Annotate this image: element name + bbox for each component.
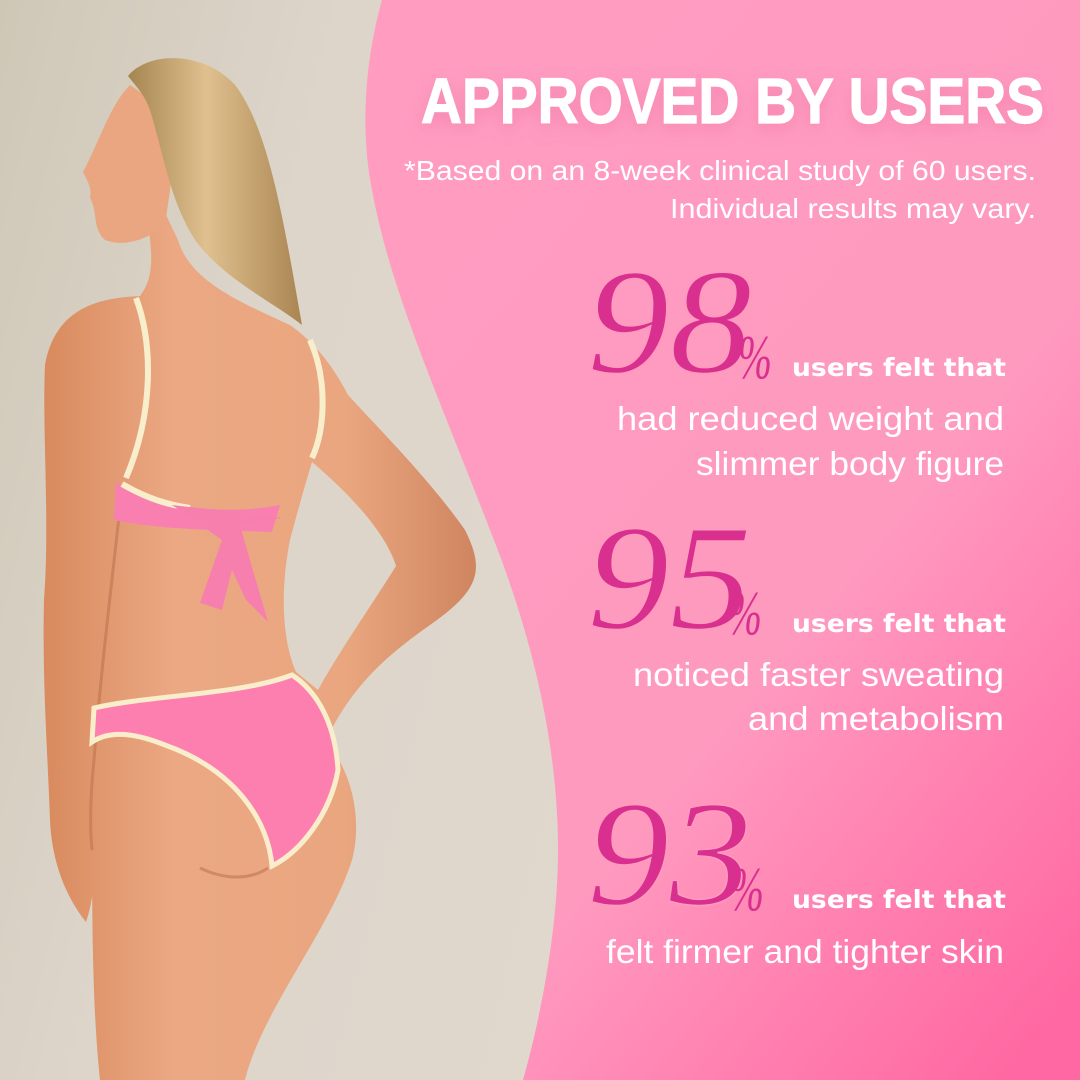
- bikini straps: [122, 298, 323, 508]
- figure: woman seen from behind in pink swimwear: [44, 58, 476, 1080]
- stat: 98%: had reduced weight and: [617, 400, 1004, 437]
- body: [44, 150, 476, 1080]
- body shading: [91, 490, 268, 877]
- stat: 93%: users felt that: [792, 885, 1006, 914]
- gap between arm and waist: [284, 462, 396, 690]
- bikini tie: [172, 505, 282, 622]
- bikini bottom: [92, 675, 338, 866]
- stat: 95%: noticed faster sweating: [633, 656, 1004, 693]
- stat: 98%: slimmer body figure: [696, 445, 1004, 482]
- pink panel with curved edge: [365, 0, 1080, 1080]
- stat: 93%: %: [730, 856, 764, 924]
- study note: *Based on an 8-week clinical study of 60 users.: [404, 155, 1036, 186]
- bikini top: [114, 482, 280, 532]
- stat: 98%: %: [738, 324, 772, 392]
- study note: [404, 155, 1036, 224]
- stat: 95%: users felt that: [792, 609, 1006, 638]
- stat: 98%: 98: [587, 239, 752, 405]
- stat: 95%: [587, 495, 1006, 737]
- hair: [128, 58, 302, 325]
- stat: 93%: [587, 771, 1006, 970]
- stat: 93%: felt firmer and tighter skin: [606, 933, 1004, 970]
- stat: 95%: 95: [587, 495, 752, 661]
- stat: 98%: users felt that: [792, 353, 1006, 382]
- face: [83, 85, 180, 243]
- stat: 98%: [587, 239, 1006, 482]
- stat: 93%: 93: [587, 771, 752, 937]
- stat: 95%: %: [728, 580, 762, 648]
- study note: Individual results may vary.: [670, 193, 1036, 224]
- stat: 95%: and metabolism: [748, 700, 1004, 737]
